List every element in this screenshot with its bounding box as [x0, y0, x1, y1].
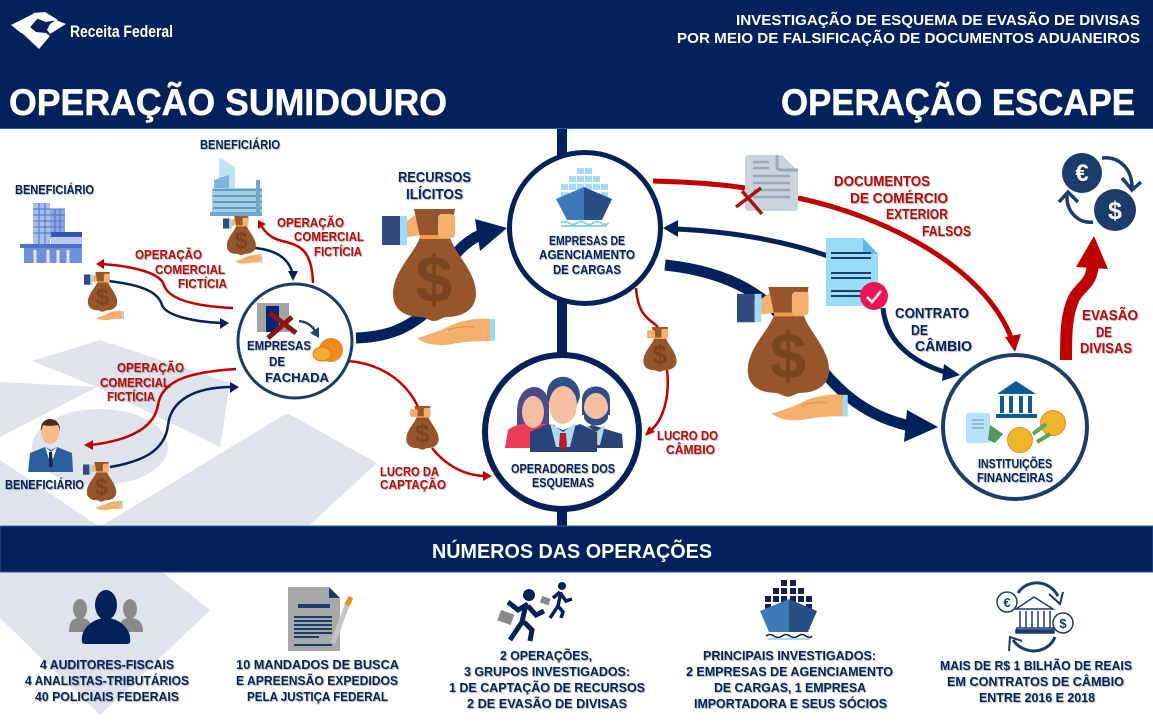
icon: currency exchange: € — [1075, 160, 1089, 187]
labels: operacao comercial ficticia, left: OPERAÇÃO — [135, 247, 202, 262]
icon: bank — [996, 381, 1037, 418]
thin arrow: lucro da captacao — [348, 361, 492, 481]
arrow: fachada to agenciamento — [356, 219, 507, 338]
icon: scroll and banknote — [966, 413, 1003, 443]
label: documentos de comercio exterior falsos — [834, 174, 971, 240]
icon: currency exchange: $ — [1108, 197, 1122, 225]
money bag: left beneficiary — [84, 272, 124, 320]
arrow: contrato to instituicoes — [883, 308, 960, 381]
label: evasao de divisas: DIVISAS — [1080, 341, 1132, 357]
icon: orange — [313, 338, 343, 362]
icon: coins — [1008, 410, 1066, 452]
arrow: evasao de divisas — [1066, 236, 1108, 360]
stat: equipe — [25, 590, 189, 704]
label: instituicoes — [977, 456, 1053, 485]
label: agenciamento: AGENCIAMENTO — [539, 247, 635, 262]
label: lucro da captacao — [380, 464, 446, 492]
labels: beneficiario — [5, 137, 280, 492]
text: equipe: 40 POLICIAIS FEDERAIS — [35, 689, 179, 704]
label: lucro do cambio: CÂMBIO — [666, 442, 715, 457]
label: operadores: ESQUEMAS — [532, 475, 594, 490]
thin arrows: bottom beneficiary — [84, 369, 239, 467]
label: fachada — [247, 338, 330, 385]
icon: ship — [760, 580, 817, 639]
label: contrato de cambio: CONTRATO — [895, 306, 969, 322]
label: instituicoes: INSTITUIÇÕES — [978, 456, 1052, 471]
icon: bank and exchange: $ — [1059, 616, 1067, 631]
label: evasao de divisas: DE — [1096, 325, 1112, 341]
label: documentos de comercio exterior falsos: FALSOS — [922, 224, 971, 240]
icon: people — [69, 590, 143, 644]
header band — [0, 0, 1153, 129]
label: documentos de comercio exterior falsos: DE COMÉRCIO — [850, 190, 948, 207]
money bag: top beneficiary — [223, 216, 263, 264]
thin arrow: lucro do cambio — [636, 288, 668, 436]
stat: investigados — [686, 580, 893, 711]
money bag: lucro da captacao: $ — [415, 420, 429, 448]
logo: Receita Federal — [11, 12, 173, 49]
label: contrato de cambio: CÂMBIO — [915, 337, 972, 355]
arrow: contrato to agenciamento — [663, 220, 828, 256]
text: investigados: PRINCIPAIS INVESTIGADOS: — [703, 648, 876, 663]
label: lucro do cambio — [657, 428, 718, 457]
label: instituicoes: FINANCEIRAS — [977, 470, 1053, 485]
text: investigados: 2 EMPRESAS DE AGENCIAMENTO — [686, 664, 893, 679]
text: investigados: DE CARGAS, 1 EMPRESA — [714, 680, 867, 695]
band: numeros das operacoes: NÚMEROS DAS OPERAÇÕES — [432, 539, 712, 563]
stat: operacoes — [449, 582, 645, 711]
text: mandados: E APREENSÃO EXPEDIDOS — [236, 673, 398, 688]
header subtitle: POR MEIO DE FALSIFICAÇÃO DE DOCUMENTOS ADUANEIROS — [677, 29, 1140, 47]
label: lucro do cambio: LUCRO DO — [657, 428, 718, 443]
icon: bank and exchange — [997, 583, 1073, 651]
label: evasao de divisas — [1080, 306, 1138, 357]
label: agenciamento — [539, 233, 635, 277]
arrow: documentos falsos — [653, 181, 1021, 352]
text: operacoes — [449, 648, 645, 711]
label: lucro da captacao: CAPTAÇÃO — [380, 477, 446, 492]
money bag: bottom beneficiary — [83, 462, 123, 510]
label: agenciamento: DE CARGAS — [553, 262, 621, 277]
stat: cambio — [940, 583, 1132, 705]
label: operadores: OPERADORES DOS — [511, 461, 615, 476]
text: operacoes: 1 DE CAPTAÇÃO DE RECURSOS — [449, 680, 645, 695]
icon: operators group — [505, 377, 623, 452]
label: recursos ilicitos: ILÍCITOS — [406, 186, 463, 203]
text: equipe — [25, 657, 189, 704]
icon: currency exchange — [1059, 153, 1141, 231]
labels: beneficiario: BENEFICIÁRIO — [5, 477, 84, 492]
icon: shell company building crossed — [257, 303, 296, 338]
text: cambio: MAIS DE R$ 1 BILHÃO DE REAIS — [940, 658, 1132, 673]
labels: operacao comercial ficticia, bottom: FICTÍCIA — [107, 389, 156, 404]
money bag: lucro do cambio — [643, 327, 677, 372]
header subtitle — [677, 11, 1140, 47]
text: mandados: 10 MANDADOS DE BUSCA — [236, 657, 400, 672]
text: investigados: IMPORTADORA E SEUS SÓCIOS — [694, 696, 887, 711]
icon: forged document — [736, 155, 798, 214]
labels: operacao comercial ficticia, top: FICTÍCIA — [314, 244, 363, 259]
money bag: lucro da captacao — [406, 406, 439, 450]
icon: beneficiary person — [28, 419, 73, 472]
text: cambio: ENTRE 2016 E 2018 — [979, 690, 1095, 705]
labels: beneficiario: BENEFICIÁRIO — [15, 182, 94, 197]
labels: operacao comercial ficticia, left — [135, 247, 228, 291]
money bag: lucro do cambio: $ — [652, 340, 667, 370]
label: agenciamento: EMPRESAS DE — [549, 233, 625, 248]
icon: cargo ship — [556, 168, 612, 226]
text: operacoes: 2 DE EVASÃO DE DIVISAS — [467, 696, 627, 711]
labels: operacao comercial ficticia, bottom: OPERAÇÃO — [117, 360, 184, 375]
label: evasao de divisas: EVASÃO — [1082, 306, 1138, 324]
text: operacoes: 3 GRUPOS INVESTIGADOS: — [464, 664, 630, 679]
money bag: recursos ilicitos: $ — [416, 242, 452, 316]
icon: exchange contract — [826, 238, 888, 310]
label: recursos ilicitos — [398, 169, 471, 203]
band: numeros das operacoes — [0, 526, 1153, 572]
money bag: agenciamento to instituicoes: $ — [770, 319, 806, 392]
labels: operacao comercial ficticia, left: FICTÍCIA — [178, 276, 228, 291]
thin arrows: left beneficiary — [96, 259, 233, 329]
labels: beneficiario: BENEFICIÁRIO — [200, 137, 280, 152]
label: recursos ilicitos: RECURSOS — [398, 169, 471, 186]
label: contrato de cambio: DE — [911, 323, 928, 339]
labels: operacao comercial ficticia, bottom — [100, 360, 184, 404]
text: investigados — [686, 648, 893, 711]
label: fachada: EMPRESAS — [247, 338, 311, 353]
label: contrato de cambio — [895, 306, 972, 355]
node: operadores dos esquemas — [485, 355, 639, 509]
title: Operação Sumidouro: OPERAÇÃO SUMIDOURO — [9, 81, 447, 123]
title: Operação Escape: OPERAÇÃO ESCAPE — [781, 81, 1135, 123]
label: documentos de comercio exterior falsos: EXTERIOR — [886, 207, 948, 223]
text: equipe: 4 ANALISTAS-TRIBUTÁRIOS — [25, 673, 189, 688]
money bag: left beneficiary: $ — [96, 284, 109, 310]
node: instituicoes financeiras — [943, 355, 1087, 499]
money bag: agenciamento to instituicoes — [737, 287, 848, 420]
labels: operacao comercial ficticia, top: OPERAÇÃO — [277, 215, 344, 230]
label: lucro da captacao: LUCRO DA — [380, 464, 440, 479]
node: empresas de agenciamento de cargas — [510, 152, 660, 304]
icon: curved arrow — [299, 321, 319, 338]
labels: operacao comercial ficticia, left: COMERCIAL — [155, 262, 225, 277]
label: documentos de comercio exterior falsos: DOCUMENTOS — [834, 174, 930, 190]
labels: operacao comercial ficticia, top: COMERCIAL — [294, 229, 364, 244]
watermark: background diamonds — [0, 340, 377, 715]
arrow: agenciamento to instituicoes — [665, 265, 938, 442]
label: fachada: FACHADA — [265, 370, 330, 385]
logo: Receita Federal: Receita Federal — [70, 22, 173, 41]
text: cambio: EM CONTRATOS DE CÂMBIO — [947, 674, 1124, 689]
money bag: recursos ilicitos — [382, 209, 495, 345]
text: cambio — [940, 658, 1132, 705]
label: operadores — [511, 461, 615, 490]
icon: bank and exchange: € — [1003, 595, 1011, 610]
central vertical connector — [557, 128, 567, 526]
icon: document and pen — [288, 587, 351, 651]
money bag: top beneficiary: $ — [235, 228, 248, 254]
label: fachada: DE — [269, 354, 285, 369]
text: operacoes: 2 OPERAÇÕES, — [500, 648, 592, 663]
text: mandados: PELA JUSTIÇA FEDERAL — [247, 689, 388, 704]
stat: mandados — [236, 587, 400, 704]
money bag: bottom beneficiary: $ — [95, 474, 108, 500]
node: empresas de fachada — [238, 284, 352, 398]
labels: operacao comercial ficticia, top — [277, 215, 364, 259]
icon: building top beneficiary — [210, 157, 262, 216]
header subtitle: INVESTIGAÇÃO DE ESQUEMA DE EVASÃO DE DIVISAS — [736, 11, 1140, 29]
text: equipe: 4 AUDITORES-FISCAIS — [40, 657, 174, 672]
labels: operacao comercial ficticia, bottom: COMERCIAL — [100, 375, 170, 390]
icon: building left beneficiary — [20, 203, 82, 263]
text: mandados — [236, 657, 400, 704]
icon: running men — [497, 582, 572, 641]
thin arrows: top beneficiary — [255, 220, 313, 283]
